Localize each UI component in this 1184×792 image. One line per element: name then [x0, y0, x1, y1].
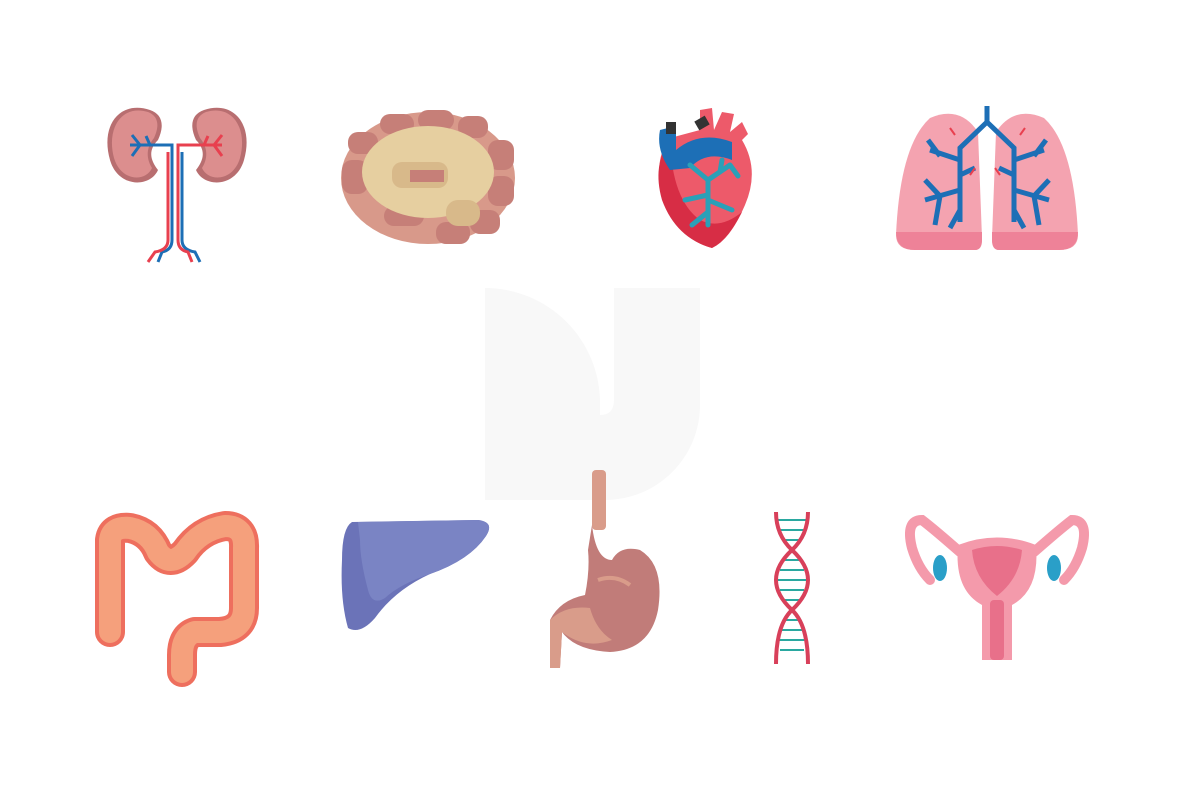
icon: heart [658, 108, 752, 248]
icon: liver [342, 520, 489, 630]
icon: lungs [896, 106, 1078, 250]
icon: DNA [776, 512, 808, 664]
icon: kidneys [107, 108, 247, 262]
icon: stomach [550, 470, 660, 668]
watermark logo [485, 288, 700, 500]
icon: uterus [910, 520, 1084, 660]
icon: brain [341, 110, 515, 244]
icon: colon [110, 526, 244, 672]
